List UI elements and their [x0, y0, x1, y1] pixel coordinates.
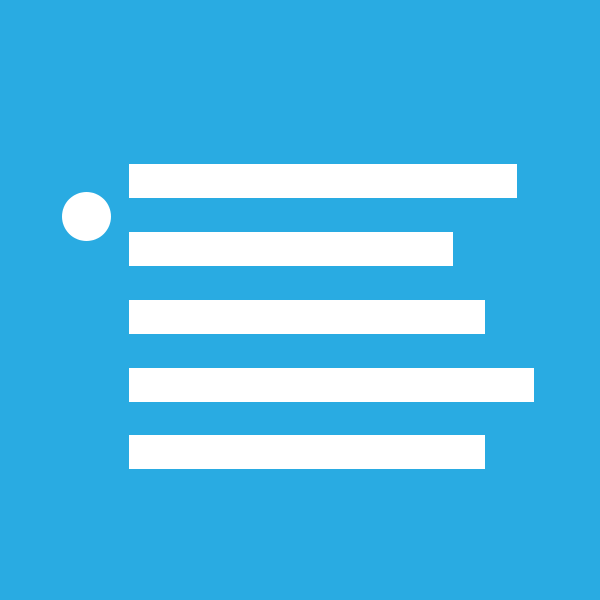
list lines	[129, 164, 534, 469]
bullet dot	[62, 192, 111, 241]
